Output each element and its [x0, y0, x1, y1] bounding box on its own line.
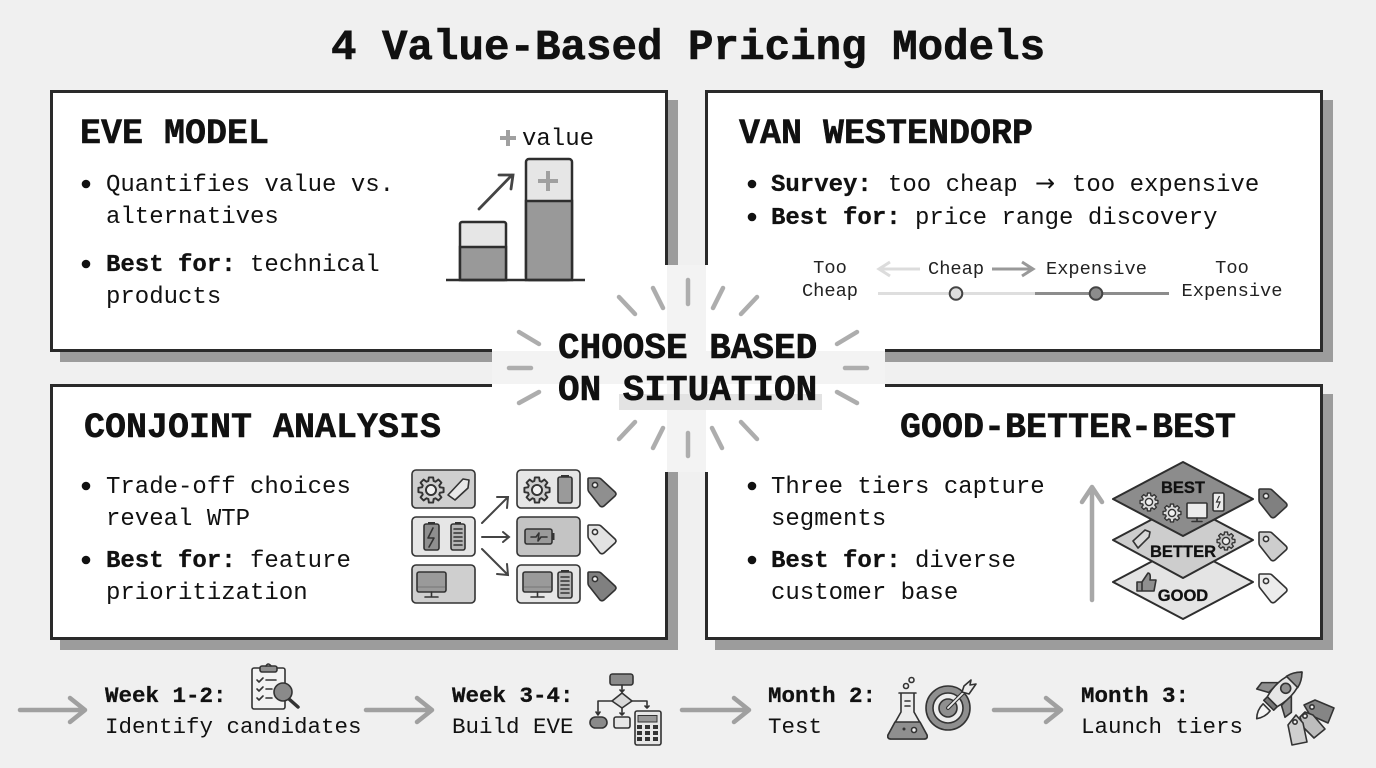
price scale diagram: Cheap: [928, 258, 984, 280]
bullet list: EVE model: [82, 172, 394, 311]
timeline step: week 1-2: Identify candidates: [105, 714, 362, 740]
bullet list: Conjoint analysis: Trade-off choices: [106, 474, 351, 501]
bullet list: EVE model: alternatives: [106, 204, 279, 231]
bullet list: Good-Better-Best: [748, 474, 1045, 607]
bullet list: Good-Better-Best: customer base: [771, 580, 958, 607]
bullet list: Good-Better-Best: Best for: diverse: [771, 548, 1016, 575]
timeline arrow 2: [366, 698, 432, 722]
trade-off diagram: [412, 470, 616, 603]
price scale diagram: Cheap: [802, 280, 858, 302]
bullet list: EVE model: Best for: technical: [106, 252, 380, 279]
title: 4 Value-Based Pricing Models: [331, 24, 1045, 72]
bullet list: Van Westendorp: [748, 169, 1259, 232]
timeline step: month 3: Month 3:: [1081, 683, 1189, 709]
panel: EVE model: [52, 92, 678, 362]
bullet list: Good-Better-Best: Three tiers capture: [771, 474, 1045, 501]
bullet list: EVE model: products: [106, 284, 221, 311]
timeline arrow 4: [994, 698, 1061, 722]
bullet list: Conjoint analysis: Best for: feature: [106, 548, 351, 575]
price scale diagram: Too: [813, 257, 847, 279]
bullet list: Conjoint analysis: prioritization: [106, 580, 308, 607]
price scale diagram: Expensive: [1182, 280, 1282, 302]
heading: EVE model: EVE MODEL: [80, 114, 269, 154]
timeline step: week 3-4: Build EVE: [452, 714, 574, 740]
bullet list: Van Westendorp: →: [1035, 169, 1055, 197]
bar chart: value uplift: [446, 126, 594, 280]
timeline step: week 3-4: [452, 674, 661, 745]
timeline step: week 1-2: Week 1-2:: [105, 683, 227, 709]
bullet list: Van Westendorp: too expensive: [1072, 172, 1259, 199]
bullet list: Van Westendorp: Survey:: [771, 172, 872, 199]
timeline step: week 1-2: [105, 664, 362, 740]
center callout: choose based on situation: ON SITUATION: [558, 370, 817, 411]
icon: flowchart with calculator: [590, 674, 661, 745]
tier stack diagram: BETTER: [1150, 543, 1216, 561]
heading: Good-Better-Best: GOOD-BETTER-BEST: [900, 408, 1236, 448]
bullet list: EVE model: Quantifies value vs.: [106, 172, 394, 199]
heading: Van Westendorp: VAN WESTENDORP: [739, 114, 1033, 154]
icon: clipboard with magnifier: [252, 664, 298, 709]
icon: rocket with price tags: [1241, 657, 1334, 745]
bullet list: Van Westendorp: Best for: price range discovery: [771, 205, 1217, 232]
bar chart: value uplift: value: [522, 126, 594, 153]
price scale diagram: [802, 257, 1282, 302]
timeline step: month 3: [1081, 657, 1334, 745]
center callout: choose based on situation: [492, 265, 885, 472]
panel: Good-Better-Best: [706, 386, 1333, 650]
price scale diagram: Expensive: [1046, 258, 1147, 280]
timeline step: month 2: Month 2:: [768, 683, 876, 709]
timeline arrow 1: [20, 698, 85, 722]
timeline step: month 2: Test: [768, 714, 822, 740]
timeline step: month 3: Launch tiers: [1081, 714, 1243, 740]
timeline step: month 2: [768, 678, 976, 740]
tier stack diagram: [1082, 462, 1287, 619]
bullet list: Good-Better-Best: segments: [771, 506, 886, 533]
bullet list: Van Westendorp: too cheap: [888, 172, 1018, 199]
timeline arrow 3: [682, 698, 749, 722]
center callout: choose based on situation: CHOOSE BASED: [558, 328, 817, 369]
icon: flask and target: [888, 678, 976, 739]
tier stack diagram: GOOD: [1158, 587, 1208, 605]
panel: Van Westendorp: [706, 92, 1333, 362]
bullet list: Conjoint analysis: [82, 474, 351, 607]
heading: Conjoint analysis: CONJOINT ANALYSIS: [84, 408, 441, 448]
tier stack diagram: BEST: [1161, 479, 1205, 497]
price scale diagram: Too: [1215, 257, 1249, 279]
bullet list: Conjoint analysis: reveal WTP: [106, 506, 250, 533]
panel: Conjoint analysis: [52, 386, 678, 650]
timeline step: week 3-4: Week 3-4:: [452, 683, 574, 709]
